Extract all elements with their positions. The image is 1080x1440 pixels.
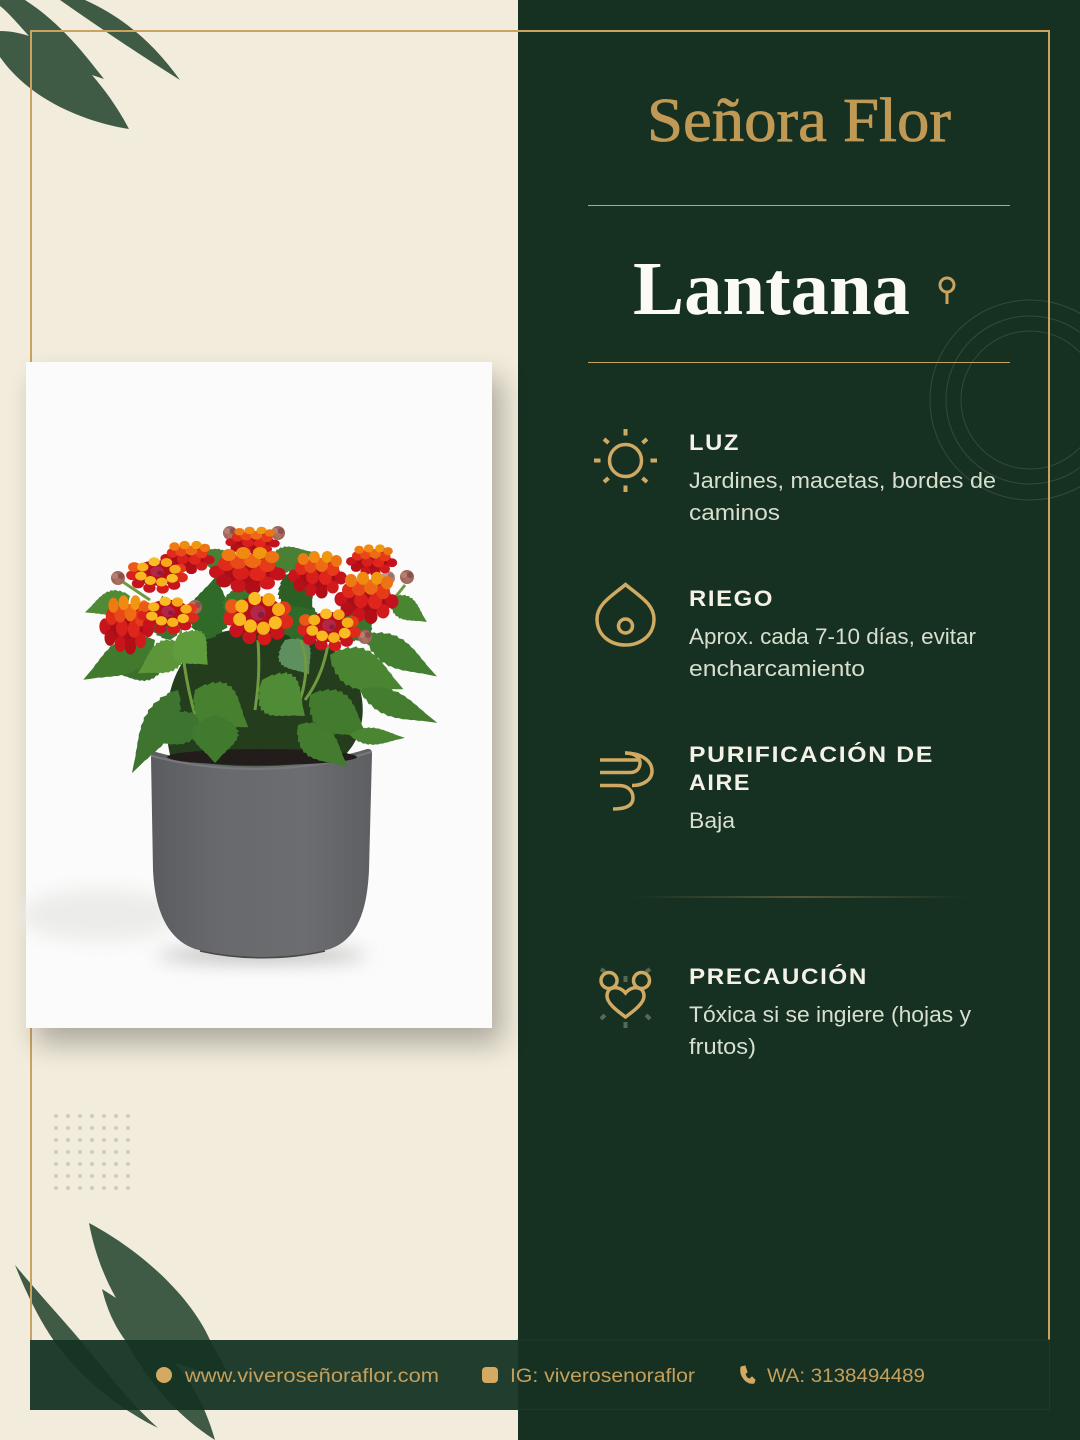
brand title: Señora Flor [647, 87, 951, 155]
description: Aprox. cada 7-10 días, evitar [689, 624, 976, 649]
description: Tóxica si se ingiere (hojas y [689, 1002, 971, 1027]
description: Baja [689, 808, 736, 833]
floor shadow [20, 889, 367, 962]
description: encharcamiento [689, 656, 865, 681]
description: caminos [689, 500, 780, 525]
section: luz [594, 429, 996, 525]
section: precaucion [601, 964, 971, 1059]
leaves: bottom left corner [15, 1223, 232, 1440]
plant foliage [75, 526, 445, 781]
description: Jardines, macetas, bordes de [689, 468, 996, 493]
plant name: Lantana [633, 247, 910, 331]
description [689, 1002, 971, 1059]
description: frutos) [689, 1034, 756, 1059]
soil [167, 749, 357, 765]
description [689, 468, 996, 525]
photo card: potted lantana [20, 362, 502, 1044]
flower clusters [99, 526, 414, 655]
heading: PURIFICACIÓN DE [689, 742, 934, 767]
heading [689, 742, 934, 795]
icon: sun [594, 429, 657, 492]
dark foliage mass [166, 628, 363, 766]
icon: heart with alert rays [601, 969, 650, 1028]
description [689, 624, 976, 681]
stems [120, 580, 405, 715]
back leaves behind flowers [145, 563, 385, 684]
dot grid [54, 1114, 130, 1190]
card background [26, 362, 492, 1028]
icon: wind [600, 753, 652, 809]
footer: whatsapp: WA: 3138494489 [767, 1366, 925, 1387]
decorative concentric circles [930, 300, 1080, 500]
heading: PRECAUCIÓN [689, 964, 868, 989]
pot [151, 749, 372, 958]
heading: LUZ [689, 430, 740, 455]
divider middle [630, 896, 970, 898]
icon: pin [940, 278, 954, 304]
heading: RIEGO [689, 586, 774, 611]
leaves [75, 540, 445, 781]
section: purificacion de aire [600, 742, 934, 833]
footer bar [30, 1340, 1050, 1410]
leaves: top left corner [0, 0, 180, 129]
footer: website: www.viveroseñoraflor.com [184, 1366, 439, 1387]
footer: instagram: IG: viverosenoraflor [510, 1366, 696, 1387]
heading: AIRE [689, 770, 751, 795]
background: cream left panel [0, 0, 518, 1440]
section: riego [597, 584, 976, 681]
icon: water drop [597, 584, 654, 645]
divider below name [588, 362, 1010, 363]
divider top [588, 205, 1010, 206]
background: dark green right panel [518, 0, 1080, 1440]
card drop shadow [36, 378, 502, 1044]
